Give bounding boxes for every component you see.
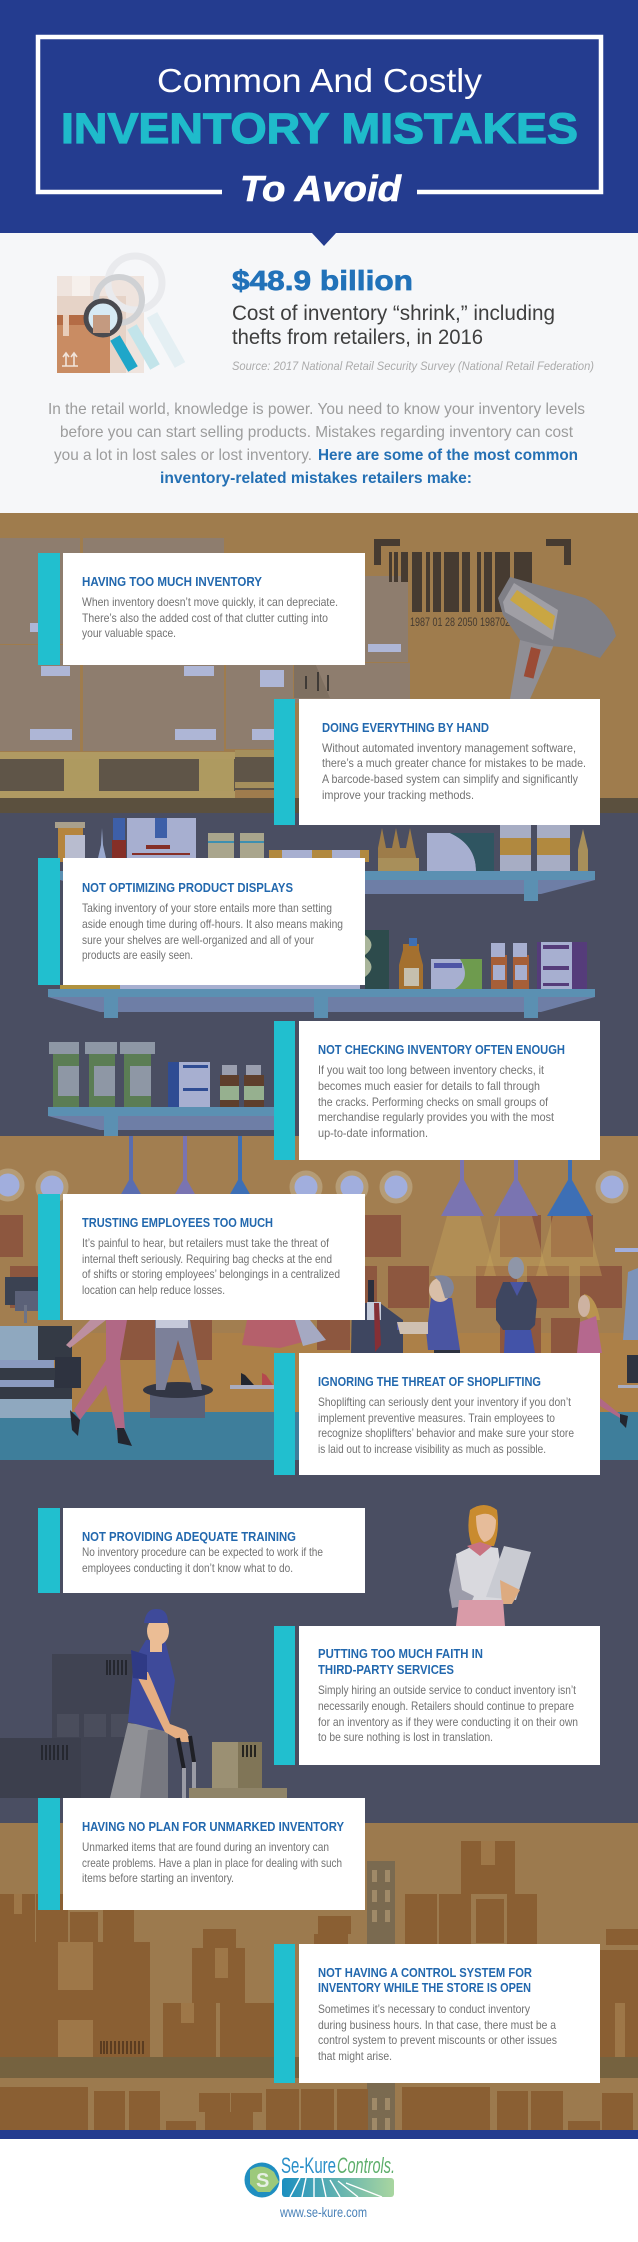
body text: Simply hiring an outside service to conduct inventory isn’t xyxy=(318,1683,577,1697)
body text: employees conducting it don’t know what to do. xyxy=(82,1561,293,1575)
logo stripe bar xyxy=(282,2178,394,2197)
heading: NOT HAVING A CONTROL SYSTEM FOR xyxy=(318,1965,533,1980)
illustration: stockroom and staff xyxy=(0,1460,638,1823)
body text: for an inventory as if they were conducting it on their own xyxy=(318,1715,578,1729)
body text xyxy=(82,901,343,962)
card 3: not optimizing product displays xyxy=(38,858,365,985)
card 7: not providing adequate training xyxy=(38,1508,365,1593)
card 6: ignoring the threat of shoplifting xyxy=(274,1353,600,1475)
card 4: not checking inventory often enough xyxy=(274,1021,600,1160)
shoes on shelf xyxy=(230,1373,274,1389)
intro paragraph: you a lot in lost sales or lost inventory. xyxy=(54,447,312,464)
body text: improve your tracking methods. xyxy=(322,788,474,802)
body text: internal theft seriously. Requiring bag checks at the end xyxy=(82,1252,332,1266)
card 8: putting too much faith in third-party services xyxy=(274,1626,600,1765)
icon: box and magnifying glasses xyxy=(57,256,180,373)
shopper on right xyxy=(600,1355,638,1428)
body text xyxy=(82,1545,323,1575)
intro paragraph: before you can start selling products. Mistakes regarding inventory can cost xyxy=(60,424,574,441)
body text xyxy=(318,1063,555,1140)
shelf 3 xyxy=(48,1107,280,1136)
blue coat mannequin xyxy=(615,1248,638,1340)
shopper in pink xyxy=(577,1294,602,1353)
body text: control system to prevent miscounts or other issues xyxy=(318,2033,557,2047)
pallet right xyxy=(235,750,295,790)
pallet left xyxy=(0,752,235,798)
illustration: pharmacy shelves xyxy=(0,813,638,1136)
shelf 2 products xyxy=(60,930,587,989)
pendant lamps xyxy=(120,1136,592,1216)
body text: A barcode-based system can simplify and significantly xyxy=(322,772,578,786)
body text: location can help reduce losses. xyxy=(82,1283,225,1297)
website url: www.se-kure.com xyxy=(279,2204,367,2220)
heading: NOT CHECKING INVENTORY OFTEN ENOUGH xyxy=(318,1042,565,1057)
heading: DOING EVERYTHING BY HAND xyxy=(322,720,489,735)
body text: items before starting an inventory. xyxy=(82,1871,234,1885)
box packing tape xyxy=(14,1841,625,2057)
body text xyxy=(82,1236,340,1297)
body text: When inventory doesn’t move quickly, it can depreciate. xyxy=(82,595,338,609)
body text xyxy=(318,1683,578,1744)
body text: Taking inventory of your store entails more than setting xyxy=(82,901,332,915)
body text: recognize shoplifters’ behavior and make sure your store xyxy=(318,1426,574,1440)
body text: becomes much easier for details to fall through xyxy=(318,1079,540,1093)
barcode number: 1987 01 28 2050 198702 xyxy=(410,615,510,629)
intro paragraph xyxy=(48,401,585,487)
heading: THIRD-PARTY SERVICES xyxy=(318,1662,454,1677)
body text: implement preventive measures. Train employees to xyxy=(318,1411,555,1425)
pendant lamp light cones xyxy=(430,1216,602,1276)
body text: No inventory procedure can be expected to work if the xyxy=(82,1545,323,1559)
body text: Sometimes it’s necessary to conduct inventory xyxy=(318,2002,530,2016)
stat description xyxy=(232,302,555,349)
body text xyxy=(318,2002,557,2063)
body text: products are easily seen. xyxy=(82,948,193,962)
body text: There’s also the added cost of that clutter cutting into xyxy=(82,611,328,625)
shopper on left xyxy=(55,1320,132,1446)
body text xyxy=(322,741,586,802)
rack shelf beam xyxy=(0,2057,638,2078)
worker with hand truck xyxy=(110,1609,194,1798)
bottom band xyxy=(0,2130,638,2139)
body text: your valuable space. xyxy=(82,626,176,640)
title line 2: INVENTORY MISTAKES xyxy=(61,105,578,153)
body text: of shifts or storing employees’ belongings in a centralized xyxy=(82,1267,340,1281)
icon: globe xyxy=(244,2162,280,2198)
box labels xyxy=(30,623,401,740)
body text xyxy=(82,595,338,640)
card 5: trusting employees too much xyxy=(38,1194,365,1320)
body text: up-to-date information. xyxy=(318,1126,428,1140)
heading xyxy=(318,1646,483,1677)
logo wordmark: Controls. xyxy=(337,2153,395,2178)
illustration: retail store xyxy=(0,1136,638,1460)
body text xyxy=(318,1395,574,1456)
body text: create problems. Have a plan in place for dealing with such xyxy=(82,1856,342,1870)
heading: HAVING NO PLAN FOR UNMARKED INVENTORY xyxy=(82,1819,344,1834)
employee reading clipboard xyxy=(449,1505,531,1626)
heading: NOT OPTIMIZING PRODUCT DISPLAYS xyxy=(82,880,293,895)
body text: If you wait too long between inventory checks, it xyxy=(318,1063,545,1077)
logo wordmark: Se-Kure xyxy=(281,2153,336,2178)
card 10: not having a control system xyxy=(274,1944,600,2083)
body text: aside enough time during off-hours. It also means making xyxy=(82,917,343,931)
rack uprights xyxy=(367,1861,395,2130)
body text: during business hours. In that case, there must be a xyxy=(318,2018,556,2032)
stat description: Cost of inventory “shrink,” including xyxy=(232,302,555,325)
barcode scanner xyxy=(498,577,616,699)
small barcode label xyxy=(101,2041,143,2054)
shelf 1 products xyxy=(55,818,588,871)
wall panels xyxy=(0,1215,622,1360)
cash register xyxy=(0,1277,72,1418)
dress on display xyxy=(242,1320,303,1348)
heading: PUTTING TOO MUCH FAITH IN xyxy=(318,1646,483,1661)
stacked boxes on hand truck xyxy=(189,1742,287,1800)
ceiling spotlights xyxy=(0,1171,626,1201)
title line 1: Common And Costly xyxy=(157,62,483,99)
icon: globe: S xyxy=(256,2170,269,2192)
intro paragraph: Here are some of the most common xyxy=(318,447,578,464)
heading xyxy=(318,1965,533,1995)
card 1: having too much inventory xyxy=(38,553,365,665)
intro paragraph: inventory-related mistakes retailers make: xyxy=(160,470,472,487)
lower shelf boxes xyxy=(0,2087,633,2130)
heading: INVENTORY WHILE THE STORE IS OPEN xyxy=(318,1980,531,1995)
title line 3: To Avoid xyxy=(240,168,402,209)
suit mannequin xyxy=(351,1280,403,1353)
mannequin on pedestal xyxy=(143,1320,213,1418)
body text: Shoplifting can seriously dent your inventory if you don’t xyxy=(318,1395,572,1409)
illustration: warehouse boxes and barcode scanner xyxy=(0,513,638,813)
body text: sure your shelves are well-organized and all of your xyxy=(82,933,314,947)
upper shelf boxes xyxy=(0,1841,638,2057)
stat and intro panel xyxy=(0,233,638,513)
heading: TRUSTING EMPLOYEES TOO MUCH xyxy=(82,1215,273,1230)
card 2: doing everything by hand xyxy=(274,699,600,825)
body text: to be sure nothing is lost in translation. xyxy=(318,1730,493,1744)
shelf 2 xyxy=(48,989,595,1018)
body text xyxy=(82,1840,342,1885)
male mannequin in sweater xyxy=(496,1257,537,1353)
barcode xyxy=(374,539,571,641)
body text: Without automated inventory management software, xyxy=(322,741,576,755)
body text: merchandise regularly provides you with the most xyxy=(318,1110,555,1124)
intro paragraph: In the retail world, knowledge is power. You need to know your inventory levels xyxy=(48,401,585,418)
stat source: Source: 2017 National Retail Security Survey (National Retail Federation) xyxy=(232,359,594,373)
heading: HAVING TOO MUCH INVENTORY xyxy=(82,574,262,589)
salesman xyxy=(397,1275,460,1353)
shelf 3 products xyxy=(49,1042,264,1107)
stat description: thefts from retailers, in 2016 xyxy=(232,326,483,349)
shelf 1 xyxy=(48,871,595,901)
body text: It’s painful to hear, but retailers must take the threat of xyxy=(82,1236,330,1250)
body text: Unmarked items that are found during an inventory can xyxy=(82,1840,329,1854)
footer logo xyxy=(244,2153,395,2198)
heading: IGNORING THE THREAT OF SHOPLIFTING xyxy=(318,1374,541,1389)
body text: that might arise. xyxy=(318,2049,392,2063)
body text: is laid out to increase visibility as much as possible. xyxy=(318,1442,546,1456)
title frame xyxy=(38,37,601,192)
heading: NOT PROVIDING ADEQUATE TRAINING xyxy=(82,1529,296,1544)
body text: the cracks. Performing checks on small groups of xyxy=(318,1095,549,1109)
body text: necessarily enough. Retailers should continue to prepare xyxy=(318,1699,574,1713)
card 9: having no plan for unmarked inventory xyxy=(38,1798,365,1910)
dark stacked boxes xyxy=(0,1654,167,1798)
body text: there’s a much greater chance for mistakes to be made. xyxy=(322,756,586,770)
illustration: warehouse racks of boxes xyxy=(0,1823,638,2130)
header banner xyxy=(0,0,638,233)
cardboard boxes xyxy=(0,538,410,751)
stat figure: $48.9 billion xyxy=(232,265,413,296)
